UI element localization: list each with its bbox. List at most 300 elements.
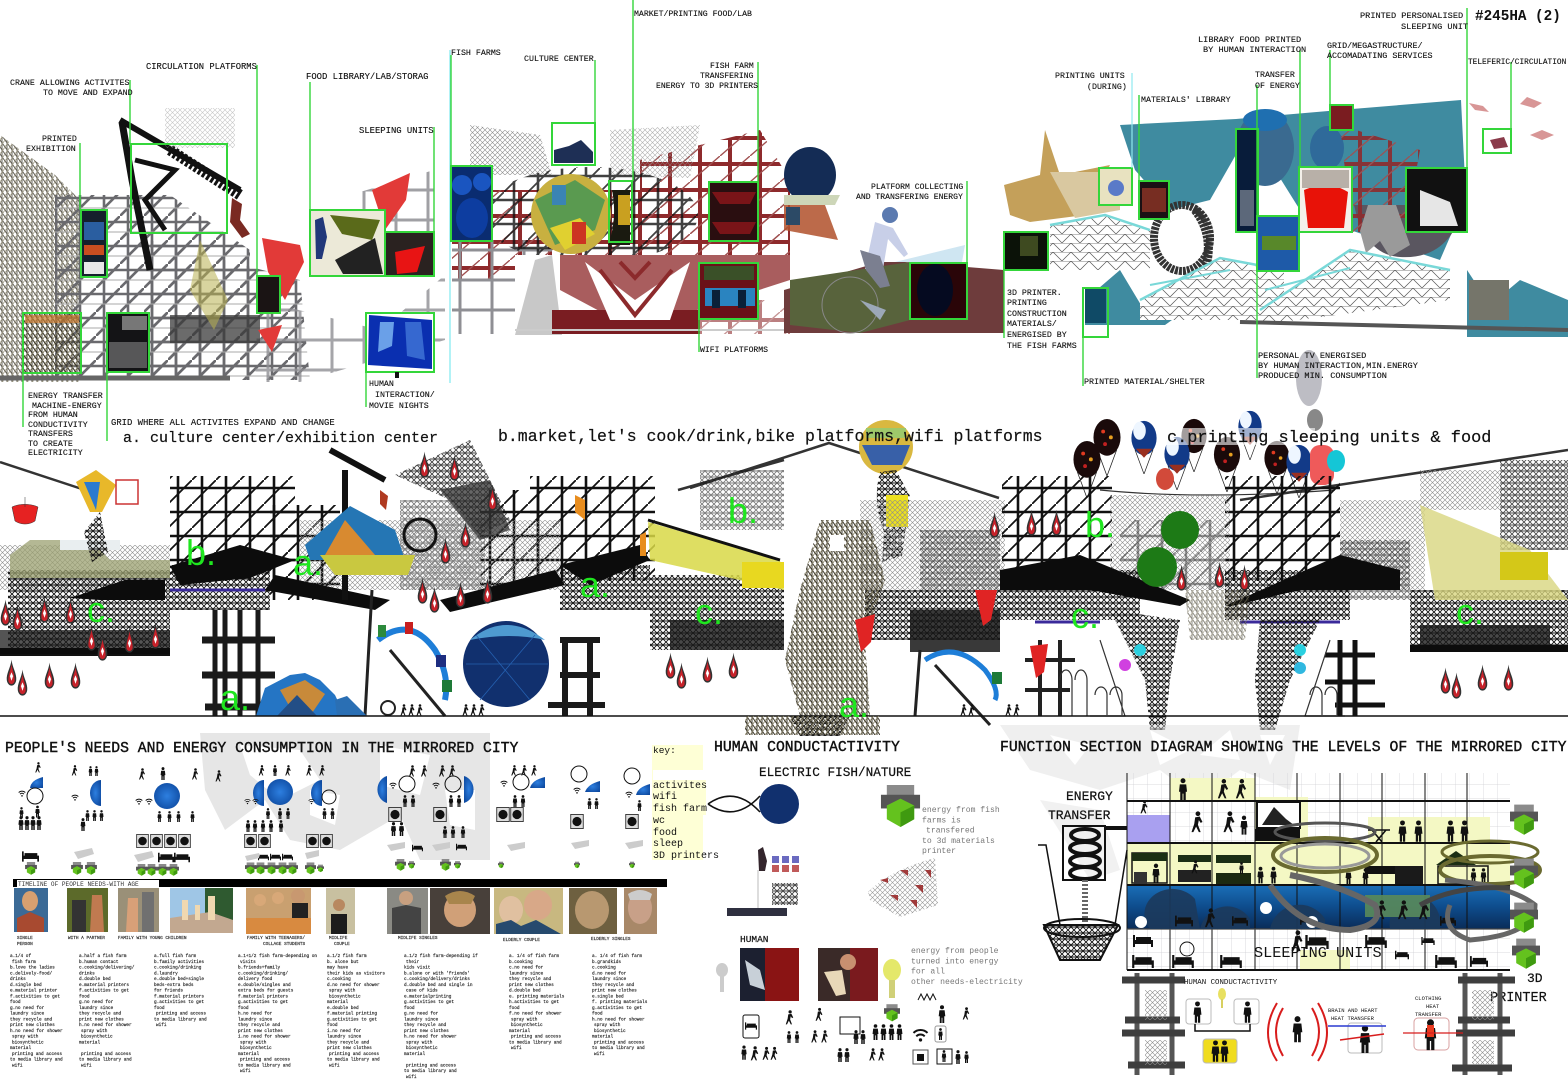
needs text columns: d.no need for shower (327, 983, 380, 988)
needs text columns: spray with (81, 1029, 108, 1034)
needs text columns: c.cooking/drinking/ (238, 971, 288, 976)
fish farm energy text: transfered (926, 827, 975, 836)
needs text columns: printing and access (81, 1052, 131, 1057)
key (652, 745, 719, 862)
photo captions (17, 936, 631, 947)
callout labels top: CIRCULATION PLATFORMS (146, 62, 257, 72)
callout labels top: SLEEPING UNITS (359, 126, 434, 136)
purple deck edges (170, 590, 1340, 622)
clothing heat diagram: TRANSFER (1415, 1011, 1442, 1018)
green zone letters: c. (87, 589, 115, 630)
photo captions: ELDERLY SINGLES (591, 937, 631, 942)
level 1 figures (1140, 778, 1468, 842)
callout labels top: BY HUMAN INTERACTION (1203, 45, 1306, 55)
needs text columns: to media library and (238, 1063, 291, 1068)
needs text columns: b.love the ladies (10, 966, 55, 970)
callout labels top: OF ENERGY (1255, 82, 1300, 91)
needs text columns: g.activities to get (154, 1000, 204, 1005)
callout labels top: INTERACTION/ (375, 390, 435, 400)
needs text columns: e.double bed (327, 1006, 359, 1011)
needs text columns: to media library and (592, 1046, 645, 1051)
fish farm share icons (30, 776, 650, 809)
needs text columns: a. 1/4 of fish farm (509, 954, 559, 959)
material cloud (868, 858, 938, 917)
energy box (910, 263, 967, 319)
wifi icons and circles (19, 766, 640, 805)
needs text columns: a.1/2 fish farm-depending if (404, 954, 478, 959)
needs text columns: food (327, 1023, 338, 1028)
panel: human conductactivity (708, 740, 1023, 1064)
red pods on tower (855, 590, 1048, 678)
fish farm energy text: to 3d materials (922, 837, 995, 846)
needs text columns: laundry since (327, 1034, 362, 1040)
mirrored root trees (1110, 590, 1325, 730)
photo captions: ELDERLY COUPLE (503, 938, 540, 943)
needs text columns: c.cooking/delivery/drinks (404, 977, 470, 982)
needs text columns: food (154, 1006, 165, 1011)
truss and road (515, 255, 790, 335)
fish farm units (727, 847, 799, 916)
needs text columns: c.no need for (509, 966, 544, 970)
water level figures (1135, 900, 1456, 928)
key: wifi (653, 791, 677, 803)
needs text columns: d.double bed and single in (404, 983, 473, 988)
needs text columns: printing and access (156, 1012, 206, 1016)
needs text columns: print new clothes (592, 988, 637, 994)
needs text columns: to media library and (79, 1058, 132, 1062)
leader lines market (451, 0, 758, 352)
spiral ribbons (1270, 823, 1540, 940)
callout labels top: MATERIALS' LIBRARY (1141, 95, 1231, 105)
needs text columns: material (327, 1000, 348, 1005)
printing trusses (1050, 215, 1450, 325)
clothing heat diagram: HEAT (1426, 1003, 1440, 1010)
callout labels top: TO MOVE AND EXPAND (43, 89, 133, 98)
needs text columns: their (406, 960, 420, 965)
green zone letters (87, 490, 1484, 725)
top panorama: culture center section (0, 50, 450, 441)
central hatched tower (785, 520, 885, 736)
needs text columns: biosynthetic (12, 1040, 44, 1045)
needs text columns: wifi (511, 1046, 522, 1051)
needs text columns: for friends (154, 988, 183, 994)
human conductivity diagram: HUMAN CONDUCTACTIVITY (1184, 979, 1278, 987)
sun sculpture (1004, 130, 1110, 222)
callout labels top: PLATFORM COLLECTING (871, 183, 963, 192)
callout labels top: PERSONAL TV ENERGISED (1258, 351, 1366, 361)
callout labels top: ENERGISED BY (1007, 331, 1067, 340)
green zone letters: c. (1456, 591, 1484, 632)
needs text columns: food (404, 1006, 415, 1011)
needs text columns: h.activities to get (509, 1000, 559, 1005)
needs text columns: b.family activities (154, 960, 204, 965)
needs text columns: to media library and (154, 1017, 207, 1022)
needs text columns: h.no need for shower (592, 1017, 645, 1022)
needs text columns: wifi (594, 1052, 605, 1057)
needs text columns: biosynthetic (81, 1034, 113, 1040)
needs text columns: a.half a fish farm (79, 954, 127, 959)
key: 3D printers (653, 850, 719, 862)
needs text columns: laundry since (10, 1012, 45, 1016)
needs text columns: biosynthetic (511, 1023, 543, 1028)
needs pictograms (741, 994, 969, 1064)
needs text columns: material (592, 1034, 613, 1040)
needs text columns: drinks (79, 971, 95, 976)
timeline bar: TIMELINE OF PEOPLE NEEDS-WITH AGE (18, 881, 139, 888)
callout labels top: PRINTED MATERIAL/SHELTER (1084, 377, 1205, 387)
needs text columns: i.no need for shower (238, 1034, 291, 1040)
dining plate icons (137, 807, 638, 848)
background lattice density (0, 460, 1568, 656)
3d printers (1510, 805, 1540, 969)
callout labels top: ELECTRICITY (28, 449, 83, 458)
needs text columns: they recycle and (327, 1040, 370, 1045)
needs text columns: food (592, 1012, 603, 1016)
callout labels top: FISH FARMS (451, 49, 501, 58)
human conductivity diagram (1184, 979, 1278, 1063)
needs text columns: they recycle and (404, 1023, 447, 1028)
energy transfer machine (1038, 826, 1127, 960)
needs text columns: drinks (10, 977, 26, 982)
ground line (0, 715, 1568, 717)
aquarium domes (1144, 889, 1440, 929)
blue geodesic sphere (463, 621, 549, 707)
callout labels top: CONDUCTIVITY (28, 421, 88, 430)
heading: FUNCTION SECTION DIAGRAM SHOWING THE LEVELS OF THE MIRRORED CITY (1000, 740, 1567, 756)
brain and heart diagram: HEAT TRANSFER (1331, 1015, 1375, 1022)
needs text columns: c.cooking (592, 966, 616, 970)
needs text columns: c.delively-food/ (10, 971, 53, 976)
needs text columns: to media library and (509, 1040, 562, 1045)
needs text columns: print new clothes (404, 1029, 449, 1034)
needs text columns: d.single bed (10, 983, 42, 988)
grey hand (1296, 350, 1322, 406)
green zone letters: c. (1071, 595, 1099, 636)
needs text columns: b.alone or with 'friends' (404, 971, 470, 976)
human photos (740, 948, 878, 1001)
black structural grids (170, 476, 1340, 590)
needs text columns: laundry since (404, 1017, 439, 1022)
needs text columns: f.material printing (327, 1012, 377, 1016)
needs text columns: g.no need for (10, 1006, 45, 1011)
hot-air balloon tower (859, 420, 913, 562)
needs text columns: wifi (240, 1069, 251, 1074)
needs text columns: to media library and (327, 1058, 380, 1062)
needs text columns: food (509, 1006, 520, 1011)
activity figures (35, 762, 537, 782)
energy transfer label: TRANSFER (1048, 808, 1111, 823)
people energy text: other needs-electricity (911, 978, 1023, 987)
needs text columns: g.activities to get (404, 1000, 454, 1005)
needs text columns: printing and access (406, 1063, 456, 1068)
callout labels top: WIFI PLATFORMS (700, 346, 768, 355)
callout labels top: TRANSFER (1255, 71, 1295, 80)
needs text columns: laundry since (592, 977, 627, 982)
needs text columns: g.activities to get (238, 1000, 288, 1005)
callout labels top: TO CREATE (28, 440, 73, 449)
needs text columns: printing and access (594, 1040, 644, 1045)
under-ground hatching (745, 716, 880, 735)
roof lines (0, 443, 1568, 500)
callout labels top: MOVIE NIGHTS (369, 402, 429, 411)
needs text columns: d.no need for (592, 971, 627, 976)
needs text columns: d.double bed (509, 988, 541, 994)
cyan leader (1131, 73, 1133, 168)
needs text columns: e.materialprinting (404, 994, 452, 999)
zone heading b: b.market,let's cook/drink,bike platforms,wifi platforms (498, 427, 1043, 446)
needs text columns: b.human contact (79, 960, 119, 965)
needs text columns: they recycle and (238, 1023, 281, 1028)
callout labels top: GRID/MEGASTRUCTURE/ (1327, 41, 1422, 51)
ferris wheel (365, 590, 452, 716)
needs text columns: g.activities to get (592, 1006, 642, 1011)
callout labels top: PRODUCED MIN. CONSUMPTION (1258, 371, 1387, 381)
needs text columns: biosynthetic (594, 1029, 626, 1034)
cyan guide line (449, 50, 451, 383)
section grid (1127, 773, 1510, 970)
leader (966, 181, 968, 263)
needs text columns: e. printing materials (509, 994, 565, 999)
callout labels top: FISH FARM (710, 62, 754, 71)
heading: PEOPLE'S NEEDS AND ENERGY CONSUMPTION IN THE MIRRORED CITY (5, 741, 519, 757)
wheel body (1154, 205, 1210, 271)
box contents (25, 215, 432, 378)
needs text columns: food (10, 1000, 21, 1005)
teal canvas (1120, 100, 1466, 260)
heading: HUMAN CONDUCTACTIVITY (714, 740, 900, 756)
needs text columns: spray with (12, 1034, 39, 1040)
needs text columns: printing and access (240, 1058, 290, 1062)
green zone letters: b. (186, 532, 216, 573)
printer (881, 785, 920, 827)
columns (202, 610, 1385, 716)
sleeping level (1132, 930, 1488, 968)
needs text columns: print new clothes (79, 1017, 124, 1022)
needs text columns: b.grandkids (592, 960, 621, 965)
callout labels top: PRINTED (42, 135, 77, 144)
needs text columns: d.laundry (154, 971, 178, 976)
dense mesh decks (0, 565, 1568, 652)
lattice scaffolding (0, 135, 445, 382)
3d printer label: PRINTER (1490, 991, 1547, 1006)
needs text columns: laundry since (509, 971, 544, 976)
fish farm energy text: farms is (922, 816, 961, 825)
needs text columns: material (79, 1040, 100, 1045)
needs text columns: c.cooking/delivering/ (79, 966, 135, 970)
needs text columns: b. alone but (327, 960, 359, 965)
callout labels top: HUMAN (369, 380, 394, 389)
market colour bands (10, 495, 1568, 600)
photo captions: SINGLE (17, 936, 33, 941)
needs text columns: wifi (12, 1063, 23, 1068)
globe (784, 147, 836, 203)
needs text columns: i.no need for (327, 1029, 362, 1034)
people energy text: for all (911, 968, 945, 977)
needs text columns: biosynthetic (406, 1046, 438, 1051)
callout labels top (10, 9, 1567, 458)
needs text columns: wifi (156, 1023, 167, 1028)
key: wc (653, 816, 665, 827)
crane (120, 108, 240, 270)
panel: people's needs (5, 741, 719, 1080)
wheel (1195, 210, 1208, 270)
photo captions: FAMILY WITH TEENAGERS/ (247, 936, 305, 941)
key: sleep (653, 838, 683, 850)
callout labels top: TRANSFERS (28, 430, 73, 439)
needs text columns: e.double bed+single (154, 977, 204, 982)
needs text columns: g.no need for (79, 1000, 114, 1005)
needs text columns: extra beds for guests (238, 988, 294, 994)
needs text columns: f.no need for shower (509, 1012, 562, 1016)
box contents (1020, 137, 1508, 323)
wheel (917, 264, 953, 316)
green zone letters: c. (695, 591, 723, 632)
needs text columns: material (404, 1052, 425, 1057)
photo captions: COLLAGE STUDENTS (263, 942, 306, 947)
balloon cluster (1073, 409, 1345, 498)
blue rock forms (256, 673, 367, 716)
needs text columns: b.friends+family (238, 966, 281, 970)
green boxes: left section (23, 144, 434, 373)
callout labels top: FROM HUMAN (28, 411, 78, 420)
climbing figure (230, 198, 250, 238)
zone heading a: a. culture center/exhibition center (123, 430, 438, 447)
callout labels top: THE FISH FARMS (1007, 342, 1077, 351)
key: activites (653, 780, 707, 792)
people energy text: energy from people (911, 947, 999, 956)
photo captions: MIDLIFE (329, 936, 348, 941)
clothing heat diagram: CLOTHING (1415, 995, 1441, 1002)
callout labels top: 3D PRINTER. (1007, 289, 1062, 298)
needs text columns: food (79, 994, 90, 999)
subheading electric fish: ELECTRIC FISH/NATURE (759, 765, 911, 780)
needs text columns: a. 1/4 of fish farm (592, 954, 642, 959)
needs text columns: spray with (329, 988, 356, 994)
needs text columns: their kids as visitors (327, 971, 385, 976)
needs text columns: visits (240, 960, 256, 965)
needs text columns: spray with (240, 1040, 267, 1045)
people energy text: turned into energy (911, 957, 999, 966)
callout labels top: ACCOMADATING SERVICES (1327, 51, 1433, 61)
leader lines left (23, 65, 434, 441)
needs text columns: they recycle and (79, 1012, 122, 1016)
needs text columns: print new clothes (509, 983, 554, 988)
cloud specks (880, 870, 931, 908)
sloped platform (784, 262, 1004, 333)
red lattice (452, 125, 790, 334)
heat figure (1268, 1003, 1327, 1061)
callout labels top: PRINTING (1007, 299, 1047, 308)
needs text columns: material (10, 1046, 31, 1051)
callout labels top: (DURING) (1087, 82, 1127, 92)
spheres (1236, 109, 1464, 257)
needs text columns: f.material printers (238, 994, 288, 999)
teleferic pieces (1469, 97, 1554, 140)
brain and heart diagram (1328, 1007, 1386, 1053)
printers (25, 859, 635, 876)
timeline photos (14, 888, 657, 934)
timeline bar (13, 879, 667, 888)
seated grey figure (1360, 205, 1410, 257)
needs text columns: material (238, 1052, 259, 1057)
needs text columns: printing and access (329, 1052, 379, 1057)
needs text columns: spray with (406, 1040, 433, 1045)
needs text columns: g.no need for (404, 1012, 439, 1016)
needs text columns: fish farm (12, 960, 36, 965)
needs text columns: to media library and (404, 1069, 457, 1074)
needs text columns: e.material printers (79, 983, 129, 988)
needs text columns: beds-extra beds (154, 983, 194, 988)
sleeping units label: SLEEPING UNITS (1254, 944, 1382, 962)
central crane and tent (305, 440, 510, 600)
brain and heart diagram: BRAIN AND HEART (1328, 1007, 1378, 1014)
green zone letters: a. (839, 684, 869, 725)
callout labels top: TRANSFERING (700, 72, 754, 81)
needs text columns: a.1/2 fish farm (327, 954, 367, 959)
photo captions: COUPLE (334, 942, 350, 947)
needs text columns: h.no need for shower (404, 1034, 457, 1040)
needs text columns: b.cooking (509, 960, 533, 965)
green boxes: market section (451, 123, 758, 319)
photo captions: FAMILY WITH YOUNG CHILDREN (118, 936, 187, 941)
box contents (452, 140, 756, 308)
hanging pods (1, 452, 1513, 699)
slab edge (1240, 322, 1568, 330)
needs text columns: f.activities to get (10, 994, 60, 999)
needs text columns: spray with (594, 1023, 621, 1028)
callout labels top: LIBRARY FOOD PRINTED (1198, 35, 1301, 45)
fish farm energy text: energy from fish (922, 806, 1000, 815)
energy transfer label: ENERGY (1066, 789, 1113, 804)
red lattice (1340, 125, 1420, 232)
needs text columns: a.1+1/2 fish farm-depending on (238, 954, 317, 959)
key: food (653, 827, 677, 839)
mirrored ferris wheel (915, 650, 1002, 725)
green zone letters: b. (728, 490, 758, 531)
callout labels top: PRINTED PERSONALISED (1360, 11, 1463, 21)
black floor plates (0, 545, 1568, 654)
needs text columns: laundry since (79, 1006, 114, 1011)
needs text columns: material (509, 1029, 530, 1034)
needs text columns: to media library and (10, 1058, 63, 1062)
needs text columns: laundry since (238, 1017, 273, 1022)
key: fish farm (653, 803, 707, 815)
callout labels top: SLEEPING UNIT (1401, 22, 1468, 32)
left tower (12, 470, 138, 562)
key: key: (653, 745, 676, 756)
needs text columns: h.no need for (238, 1012, 273, 1016)
needs text columns: f. printing materials (592, 1000, 648, 1005)
callout labels top: CULTURE CENTER (524, 55, 594, 64)
needs text columns: e.material printer (10, 988, 58, 994)
needs text columns: a.full fish farm (154, 954, 197, 959)
cyclist (822, 207, 908, 333)
green boxes: printing section (1004, 105, 1511, 337)
needs text columns: wifi (329, 1063, 340, 1068)
needs text columns: d.double bed (79, 977, 111, 982)
needs text columns: kids visit (404, 966, 431, 970)
zone heading c: c.printing sleeping units & food (1167, 429, 1491, 448)
subheading human: HUMAN (740, 934, 769, 945)
red polygons (258, 173, 432, 352)
people rows (18, 795, 642, 838)
needs text columns (10, 954, 648, 1080)
dome market scene (531, 174, 630, 254)
top panorama: market section (451, 0, 790, 352)
callout labels top: CRANE ALLOWING ACTIVITES (10, 79, 130, 88)
green zone letters: a. (293, 542, 323, 583)
arcade buildings (1060, 640, 1345, 716)
